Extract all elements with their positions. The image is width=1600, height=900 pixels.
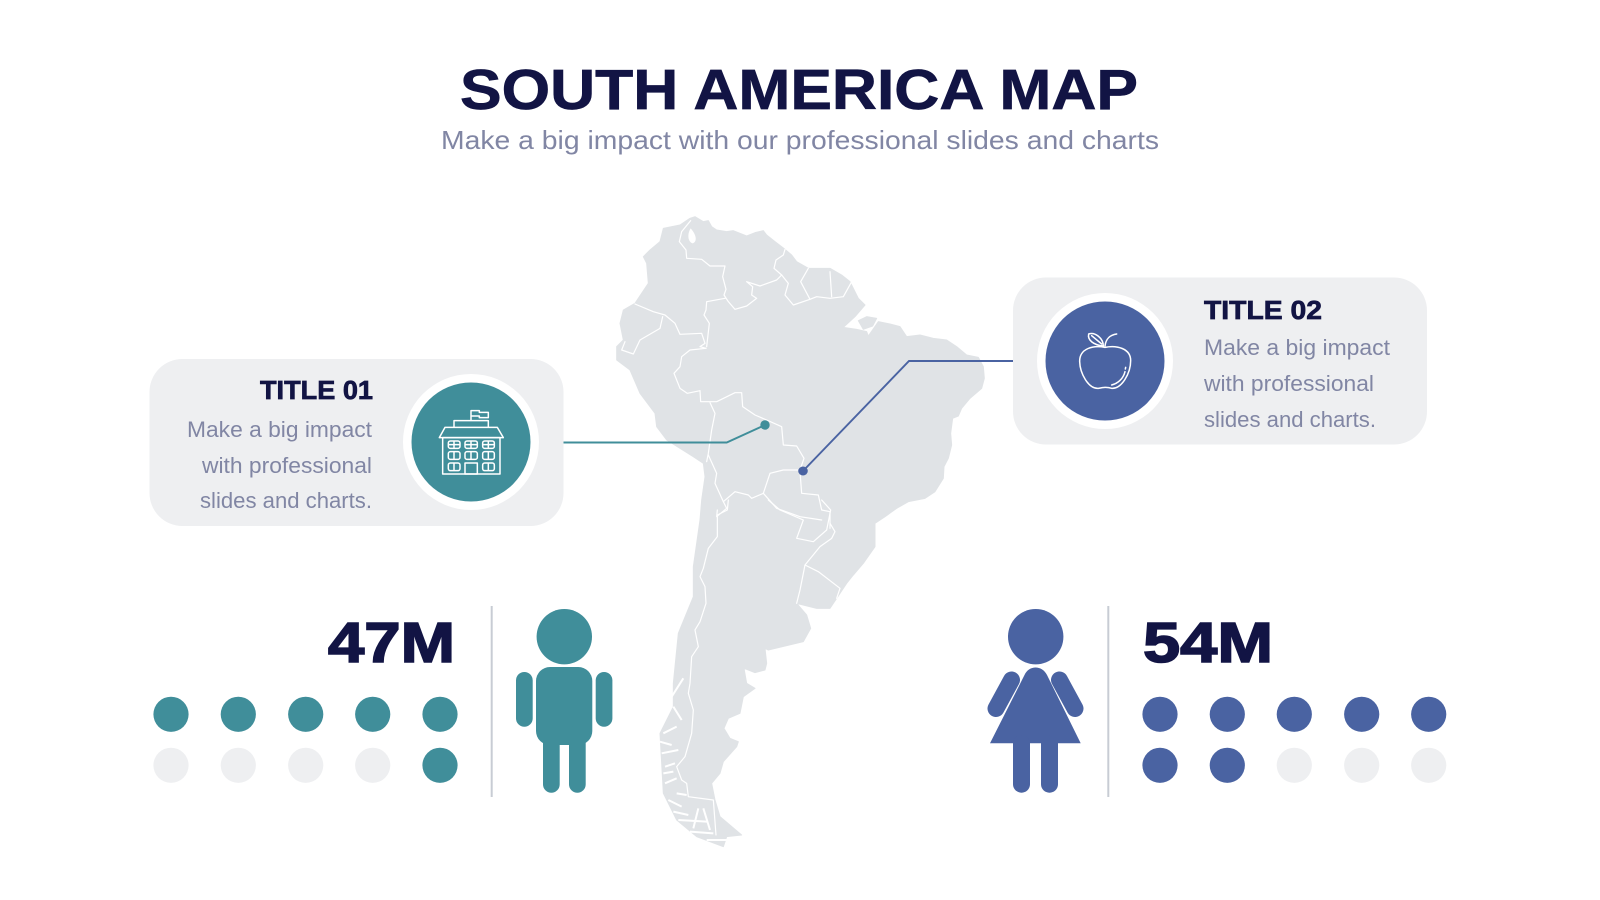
subtitle: Make a big impact with our professional slides and charts — [441, 125, 1159, 155]
divider right — [1107, 606, 1109, 797]
text block: title 02 body: with professional — [1203, 371, 1374, 396]
text block: title 01 body: Make a big impact — [187, 417, 372, 442]
text block: title 02 body: Make a big impact — [1204, 335, 1390, 360]
title: SOUTH AMERICA MAP — [460, 58, 1138, 122]
text block: title 01 body: slides and charts. — [200, 488, 372, 513]
icon: girl figure — [990, 609, 1081, 793]
text block: title 01 body — [187, 417, 372, 513]
dot rating: left, 6 of 10 — [153, 697, 458, 783]
stat: 54M: 54M — [1143, 611, 1273, 675]
text block: title 02 body: slides and charts. — [1204, 407, 1376, 432]
dot rating: right, 7 of 10 — [1142, 697, 1446, 783]
icon: apple — [1037, 293, 1173, 429]
text block: title 01 body: with professional — [201, 453, 372, 478]
map: South America — [617, 217, 984, 847]
stat: 47M: 47M — [328, 611, 455, 675]
connector line: title 02 — [798, 361, 1013, 476]
heading: title 01: TITLE 01 — [260, 375, 373, 405]
panel: title 01 — [150, 359, 564, 526]
divider left — [491, 606, 493, 797]
panel: title 02 — [1013, 278, 1427, 444]
icon: boy figure — [516, 609, 612, 793]
connector line: title 01 — [563, 420, 770, 442]
text block: title 02 body — [1203, 335, 1390, 432]
heading: title 02: TITLE 02 — [1204, 295, 1322, 325]
icon: building — [403, 374, 539, 510]
